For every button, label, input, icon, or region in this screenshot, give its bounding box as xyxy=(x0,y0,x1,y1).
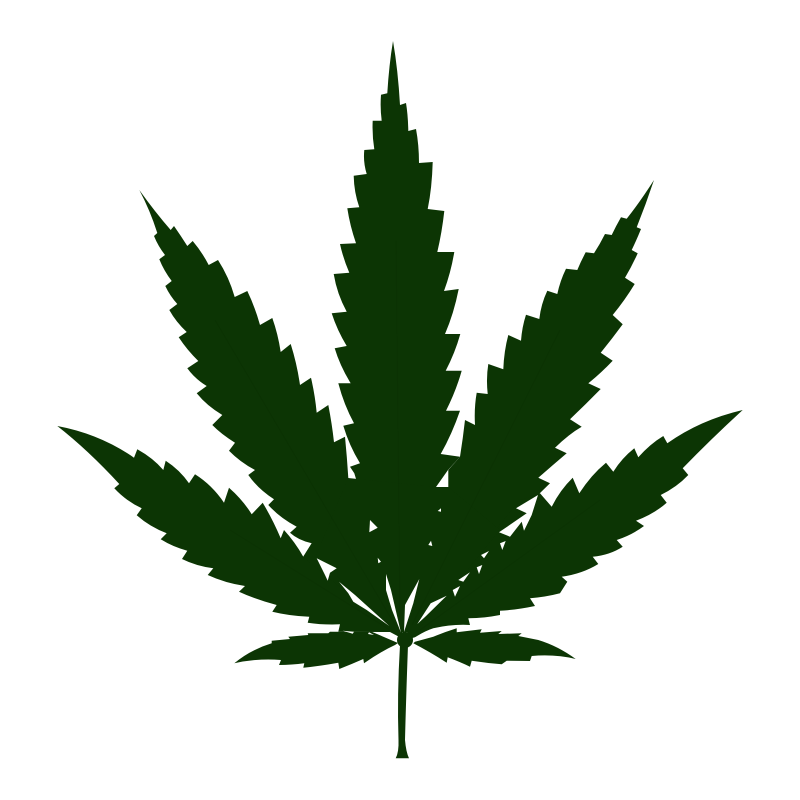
node where leaflets meet xyxy=(397,632,413,648)
veins xyxy=(215,240,600,630)
leaflet: small left xyxy=(234,632,398,669)
filler: solid centre where leaflets merge xyxy=(316,478,500,632)
leaflet: upper right xyxy=(405,180,654,640)
white gaps near the base xyxy=(317,495,538,635)
leaflet: centre xyxy=(332,41,462,640)
leaflet: lower left xyxy=(57,426,405,640)
leaflet: upper left xyxy=(139,190,405,640)
stem xyxy=(396,645,409,758)
leaflet: small right xyxy=(413,628,576,667)
leaflet: lower right xyxy=(405,410,743,640)
